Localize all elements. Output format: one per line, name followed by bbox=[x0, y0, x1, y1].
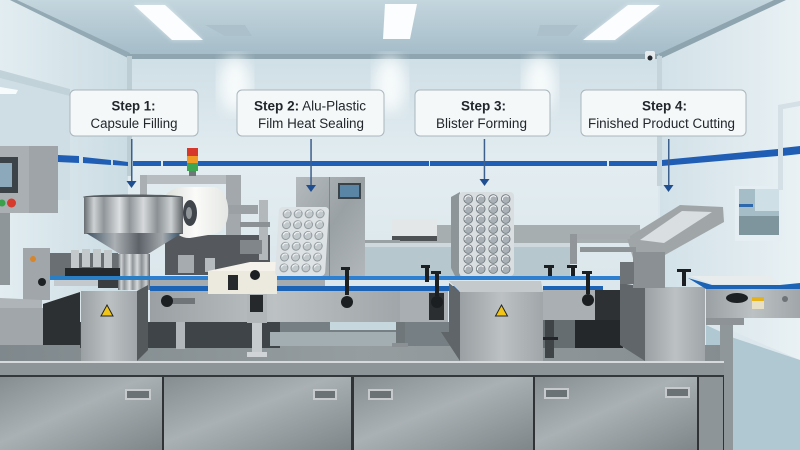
guard box with warning sign: left bbox=[81, 285, 148, 361]
right door frame bbox=[778, 101, 800, 190]
blister sheet: step 2 bbox=[275, 207, 329, 276]
white sealing head bbox=[208, 262, 277, 323]
rear machine frame bbox=[140, 175, 270, 275]
label: step 4: Finished Product Cutting bbox=[588, 116, 735, 131]
arrow: step 1 bbox=[126, 139, 136, 188]
label: step 3: Step 3: bbox=[461, 98, 506, 114]
ceiling lights bbox=[134, 4, 660, 40]
control panel bbox=[0, 146, 58, 285]
arrow: step 4 bbox=[664, 139, 674, 192]
warning triangle bbox=[101, 305, 113, 316]
left feed unit bbox=[23, 248, 150, 300]
label: step 2 bbox=[237, 90, 384, 136]
label: step 3: Blister Forming bbox=[436, 116, 527, 131]
blister sheet: step 3 bbox=[451, 192, 514, 276]
table front edge bbox=[0, 361, 724, 377]
label: step 1 bbox=[70, 90, 198, 136]
arrow: step 3 bbox=[480, 139, 490, 186]
conveyor belt bbox=[150, 276, 630, 322]
floor bbox=[706, 325, 800, 450]
blue wall stripe bbox=[58, 146, 800, 166]
film roll bbox=[162, 187, 228, 238]
cabinet doors with handles bbox=[0, 377, 724, 450]
back counter bbox=[365, 219, 640, 277]
back steel cabinet with touch screen bbox=[296, 177, 365, 277]
output chute bbox=[570, 205, 724, 288]
guard box: right bbox=[620, 283, 705, 361]
observation window bbox=[735, 186, 782, 241]
support legs bbox=[176, 320, 558, 358]
label: step 1: Capsule Filling bbox=[90, 116, 178, 131]
hopper bbox=[83, 194, 183, 290]
warning triangle bbox=[496, 305, 508, 316]
output conveyor with capsule tray bbox=[688, 276, 800, 325]
security camera bbox=[645, 51, 655, 60]
label: step 4 bbox=[581, 90, 746, 136]
stack light bbox=[187, 148, 198, 176]
label: step 1: Step 1: bbox=[112, 98, 156, 114]
label: step 2: Film Heat Sealing bbox=[258, 116, 364, 131]
machine table surface bbox=[0, 320, 724, 362]
guard box with warning sign: centre bbox=[441, 281, 543, 361]
adjustment knobs bbox=[161, 265, 691, 308]
table leg bbox=[720, 325, 733, 450]
label: step 4: Step 4: bbox=[642, 98, 687, 114]
label: step 3 bbox=[415, 90, 550, 136]
arrow: step 2 bbox=[306, 139, 316, 192]
label: step 2: Step 2: Alu-Plastic bbox=[254, 98, 366, 114]
left lower housing bbox=[0, 292, 80, 358]
